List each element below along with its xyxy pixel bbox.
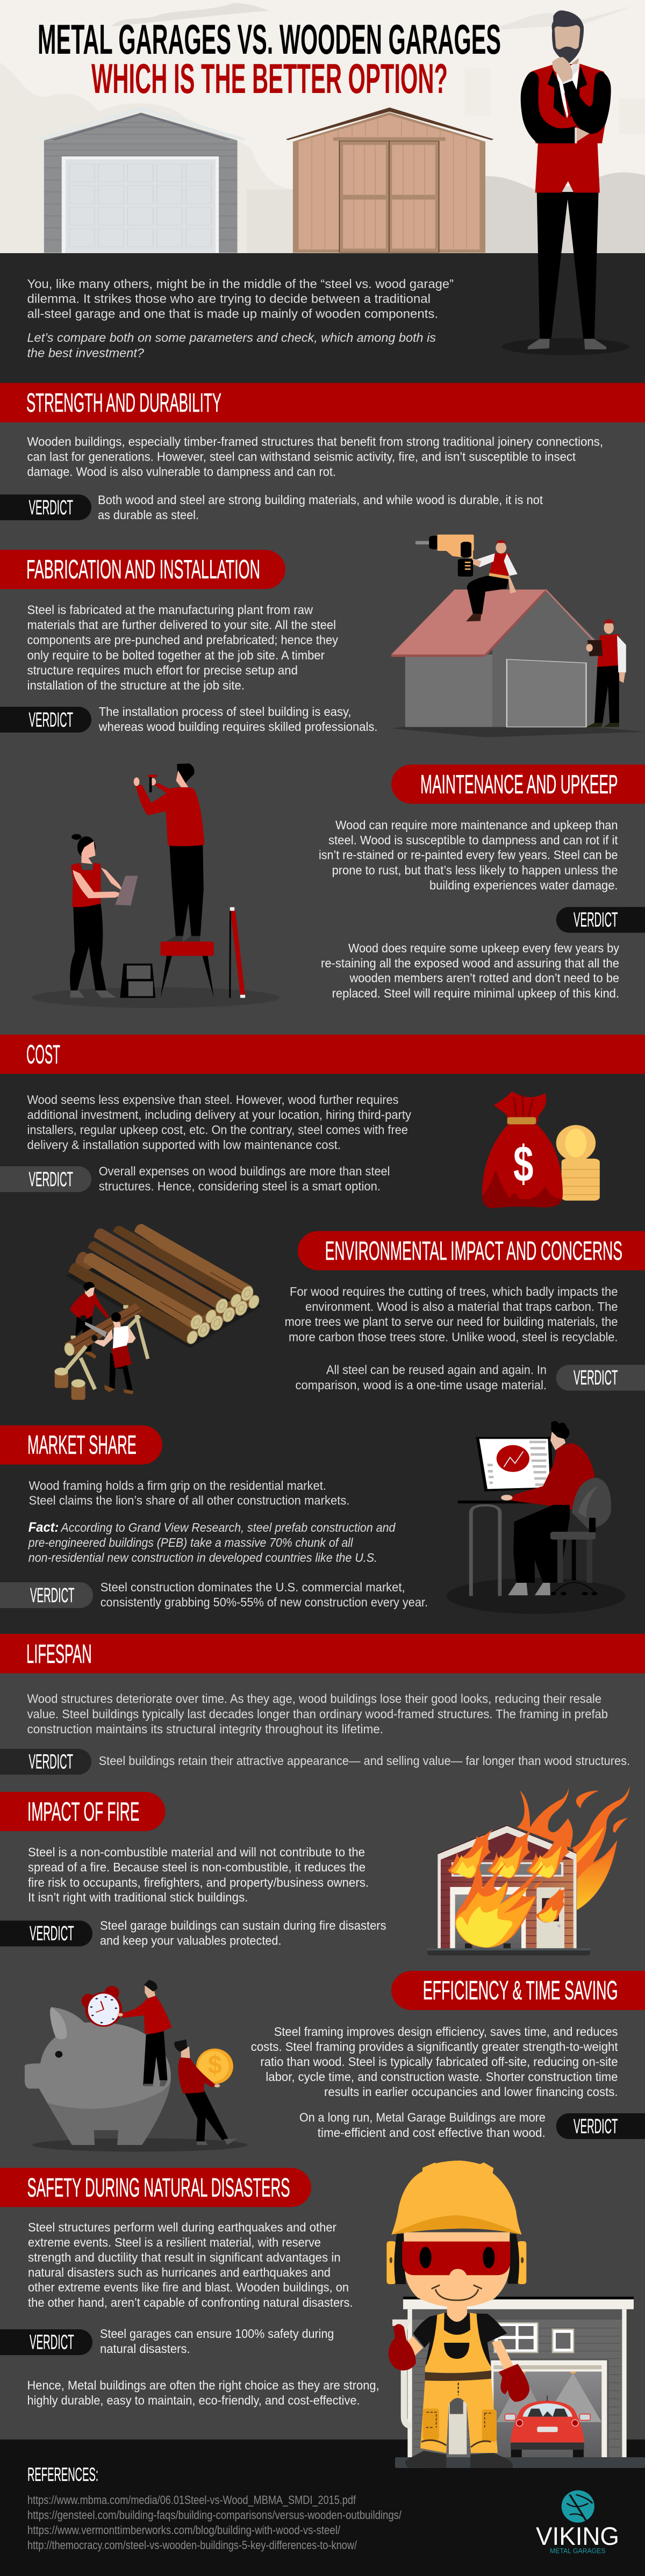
intro text: dilemma. It strikes those who are trying to decide between a traditional <box>27 291 431 305</box>
verdict: efficiency: time-efficient and cost effective than wood. <box>318 2126 546 2140</box>
text: maintenance and upkeep: isn’t re-stained or re-painted every few years. Steel can be <box>319 848 618 862</box>
verdict: fabrication: The installation process of steel building is easy, <box>99 705 351 719</box>
worker sitting on roof with drill <box>415 535 518 621</box>
conclusion text <box>27 2378 379 2407</box>
verdict: fabrication <box>0 705 377 734</box>
stool <box>160 942 214 998</box>
text: efficiency: results in earlier occupancies and lower financing costs. <box>324 2085 618 2099</box>
verdict: environmental <box>296 1363 645 1392</box>
text: fabrication and installation: components are pre-punched and prefabricated; hence they <box>27 633 338 647</box>
desk legs <box>471 1505 500 1596</box>
man on stool with hammer <box>134 764 204 942</box>
illustration: couple repairing with stool <box>31 764 280 1008</box>
text: strength and durability: Wooden buildings, especially timber-framed structures that benefit from strong traditional joinery connections, <box>27 434 603 448</box>
text: safety: other extreme events like fire and blast. Wooden buildings, on <box>28 2280 349 2294</box>
piggy bank <box>25 2007 171 2145</box>
alarm clock <box>82 1986 122 2027</box>
verdict: efficiency <box>299 2111 645 2140</box>
illustration: garage with red car <box>392 2297 645 2468</box>
text: efficiency: ratio than wood. Steel is typically fabricated off-site, reducing on-site <box>260 2055 618 2069</box>
text: impact of fire: It isn’t right with traditional stick buildings. <box>28 1890 248 1904</box>
mitts <box>389 2324 529 2402</box>
text: strength and durability: can last for generations. However, steel can withstand seismic activity, fire, and isn’t susceptible to insect <box>27 449 576 463</box>
text: fabrication and installation: materials that are further delivered to your site. All the steel <box>27 618 336 632</box>
text: efficiency: Steel framing improves design efficiency, saves time, and reduces <box>274 2025 618 2039</box>
verdict: safety <box>0 2327 334 2356</box>
text: environmental impact: environment. Wood is also a material that traps carbon. The <box>305 1300 618 1314</box>
fact text: non-residential new construction in developed countries like the U.S. <box>28 1551 377 1565</box>
text: fabrication and installation: only require to be bolted together at the job site. A timber <box>27 648 325 662</box>
text: market share: Steel claims the lion’s share of all other construction markets. <box>29 1494 349 1508</box>
banner: impact of fire <box>0 1792 166 1831</box>
verdict: fire <box>0 1919 386 1948</box>
text: lifespan: Wood structures deteriorate over time. As they age, wood buildings lose their good looks, reducing their resale <box>27 1692 601 1706</box>
verdict: maintenance: re-staining all the exposed wood and assuring that all the <box>321 956 619 970</box>
banner: strength and durability <box>0 383 645 422</box>
references list: http://themocracy.com/steel-vs-wooden-buildings-5-key-differences-to-know/ <box>27 2538 357 2552</box>
text: efficiency: labor, cycle time, and construction waste. Shorter construction time <box>266 2070 618 2084</box>
banner: cost: COST <box>26 1039 60 1070</box>
illustration: piggy bank with clock and coin <box>25 1980 248 2152</box>
banner: environmental impact and concerns <box>298 1231 645 1271</box>
text: environmental impact: more carbon those trees store. Unlike wood, steel is recyclable. <box>289 1330 618 1344</box>
arms <box>407 2336 513 2372</box>
logo: Viking Metal Garages <box>536 2490 619 2555</box>
text: efficiency: costs. Steel framing provides a significantly greater strength-to-weight <box>251 2040 618 2054</box>
fact text: Fact: <box>28 1520 59 1535</box>
text: impact of fire: Steel is a non-combustible material and will not contribute to the <box>28 1845 365 1859</box>
text: safety: Steel structures perform well during earthquakes and other <box>28 2220 336 2234</box>
references list: https://www.mbma.com/media/06.01Steel-vs-Wood_MBMA_SMDI_2015.pdf <box>27 2493 356 2507</box>
verdict: market share: VERDICT <box>30 1584 74 1607</box>
chair <box>508 1478 611 1595</box>
flames in front <box>448 1829 571 1948</box>
fact text <box>28 1520 396 1565</box>
illustration: burning house <box>427 1786 630 1955</box>
torso with overalls <box>413 2306 507 2381</box>
text: safety: natural disasters such as hurricanes and earthquakes and <box>28 2265 331 2279</box>
text: environmental impact: more trees we plant to serve our need for building materials, the <box>285 1315 618 1329</box>
intro text: You, like many others, might be in the middle of the “steel vs. wood garage” <box>27 277 454 291</box>
banner: efficiency and time saving <box>391 1971 645 2010</box>
verdict: market share <box>0 1580 428 1609</box>
text: market share: Wood framing holds a firm grip on the residential market. <box>29 1479 326 1492</box>
text: safety: strength and ductility that result in significant advantages in <box>28 2250 341 2264</box>
fact text: According to Grand View Research, steel prefab construction and <box>60 1520 396 1534</box>
folding ladder <box>120 964 155 998</box>
verdict: market share: consistently grabbing 50%-55% of new construction every year. <box>101 1595 428 1609</box>
references heading: REFERENCES: <box>27 2464 98 2485</box>
text: safety: extreme events. Steel is a resilient material, with reserve <box>28 2235 321 2249</box>
banner: fabrication and installation <box>0 550 285 589</box>
banner: cost <box>0 1035 645 1074</box>
intro text: all-steel garage and one that is made up mainly of wooden components. <box>27 306 438 320</box>
text: fabrication and installation: structure requires much effort for precise setup and <box>27 663 298 677</box>
verdict: lifespan: VERDICT <box>29 1751 73 1774</box>
conclusion text: Hence, Metal buildings are often the right choice as they are strong, <box>27 2378 379 2392</box>
man holding clock <box>117 1980 172 2086</box>
man holding coin <box>174 2040 238 2145</box>
text: maintenance and upkeep: prone to rust, but that’s less likely to happen unless the <box>332 863 618 877</box>
sawhorse and log <box>63 1303 148 1389</box>
intro text: the best investment? <box>27 346 144 360</box>
verdict: safety: natural disasters. <box>100 2342 190 2356</box>
head with helmet and visor <box>386 2161 526 2307</box>
red car <box>505 2395 590 2459</box>
verdict: efficiency: On a long run, Metal Garage Buildings are more <box>299 2111 546 2125</box>
verdict: environmental: comparison, wood is a one-time usage material. <box>296 1378 547 1392</box>
verdict: market share: Steel construction dominates the U.S. commercial market, <box>101 1580 405 1594</box>
text: environmental impact: For wood requires the cutting of trees, which badly impacts the <box>290 1285 618 1298</box>
illustration: wooden garage <box>286 107 493 253</box>
garage opening <box>490 2358 609 2458</box>
flames behind house <box>517 1786 630 1910</box>
intro text: Let’s compare both on some parameters and check, which among both is <box>27 331 436 345</box>
verdict: maintenance: Wood does require some upkeep every few years by <box>348 941 619 955</box>
text: cost: additional investment, including delivery at your location, hiring third-party <box>27 1108 411 1122</box>
icon: coin dollar sign: $ <box>208 2050 222 2079</box>
banner: lifespan <box>0 1634 645 1673</box>
banner: market share: MARKET SHARE <box>27 1430 137 1460</box>
verdict: maintenance: wooden members aren’t rotted and don’t need to be <box>349 971 619 985</box>
lumberjack in red <box>69 1282 109 1359</box>
verdict: cost: structures. Hence, considering steel is a smart option. <box>99 1179 381 1193</box>
title <box>38 16 501 102</box>
verdict: environmental: All steel can be reused again and again. In <box>326 1363 547 1377</box>
text: lifespan: value. Steel buildings typically last decades longer than ordinary wood-framed structures. The framing in prefab <box>27 1707 608 1721</box>
text: impact of fire: spread of a fire. Because steel is non-combustible, it reduces the <box>28 1860 366 1874</box>
logo: Viking Metal Garages: METAL GARAGES <box>550 2547 606 2555</box>
references list: https://www.vermonttimberworks.com/blog/building-with-wood-vs-steel/ <box>27 2523 341 2537</box>
icon: dollar sign on bag: $ <box>513 1136 533 1193</box>
leaning pole <box>229 907 245 998</box>
text: fabrication and installation: Steel is fabricated at the manufacturing plant from raw <box>27 603 313 617</box>
text: market share <box>29 1479 349 1508</box>
banner: maintenance and upkeep <box>391 764 645 804</box>
text: cost: installers, regular upkeep cost, etc. On the contrary, steel comes with free <box>27 1123 408 1137</box>
text: lifespan <box>27 1692 608 1736</box>
verdict: cost: VERDICT <box>29 1168 73 1191</box>
verdict: lifespan <box>0 1749 630 1775</box>
legs and boots <box>405 2379 513 2468</box>
illustration: man at computer <box>446 1421 626 1614</box>
text: impact of fire: fire risk to occupants, firefighters, and property/business owners. <box>28 1876 369 1890</box>
text: maintenance and upkeep: Wood can require more maintenance and upkeep than <box>335 818 618 832</box>
text: safety: the other hand, aren’t capable of confronting natural disasters. <box>28 2295 353 2309</box>
illustration: house with workers <box>391 535 645 737</box>
text: strength and durability <box>27 434 603 478</box>
verdict: maintenance: replaced. Steel will require minimal upkeep of this kind. <box>332 986 619 1000</box>
white side pipe <box>392 2323 412 2426</box>
verdict: safety: Steel garages can ensure 100% safety during <box>100 2327 334 2341</box>
verdict: strength: VERDICT <box>29 497 73 519</box>
text: maintenance and upkeep <box>319 818 618 892</box>
verdict: strength <box>0 493 543 522</box>
lumberjack sawing <box>85 1312 136 1394</box>
conclusion text: highly durable, easy to maintain, eco-friendly, and cost-effective. <box>27 2393 360 2407</box>
text: lifespan: construction maintains its structural integrity throughout its lifetime. <box>27 1722 383 1736</box>
verdict: fabrication: VERDICT <box>29 709 73 731</box>
verdict: safety: VERDICT <box>30 2331 74 2354</box>
woman with tablet <box>70 834 138 998</box>
text: fabrication and installation: installation of the structure at the job site. <box>27 678 245 692</box>
verdict: strength: as durable as steel. <box>98 508 199 522</box>
text: environmental impact <box>285 1285 618 1344</box>
verdict: maintenance <box>321 907 645 1000</box>
verdict: fire: Steel garage buildings can sustain during fire disasters <box>100 1919 386 1933</box>
illustration: cartoon builder giving thumbs up <box>386 2161 529 2468</box>
references list: https://gensteel.com/building-faqs/building-comparisons/versus-wooden-outbuildings/ <box>27 2508 402 2522</box>
fact text: pre-engineered buildings (PEB) take a massive 70% chunk of all <box>28 1535 353 1549</box>
worker standing with clipboard <box>586 619 626 727</box>
text: cost <box>27 1093 411 1152</box>
icon: money bag and coins <box>482 1091 600 1208</box>
seated man torso and head <box>501 1421 597 1510</box>
verdict: cost <box>0 1164 390 1193</box>
banner: safety during natural disasters: SAFETY DURING NATURAL DISASTERS <box>27 2173 290 2202</box>
garage windows <box>493 2322 574 2353</box>
text: safety <box>28 2220 353 2309</box>
verdict: cost: Overall expenses on wood buildings are more than steel <box>99 1164 390 1178</box>
banner: strength and durability: STRENGTH AND DURABILITY <box>26 388 221 418</box>
text: cost: Wood seems less expensive than steel. However, wood further requires <box>27 1093 399 1107</box>
text: efficiency <box>251 2025 618 2099</box>
text: fabrication and installation <box>27 603 338 692</box>
log stumps <box>54 1368 85 1400</box>
banner: safety during natural disasters <box>0 2168 311 2207</box>
banner: impact of fire: IMPACT OF FIRE <box>27 1797 139 1826</box>
text: impact of fire <box>28 1845 369 1904</box>
references list <box>27 2493 402 2552</box>
illustration: thinking man in red suit <box>502 10 629 355</box>
verdict: fire: and keep your valuables protected. <box>100 1934 282 1948</box>
illustration: metal garage <box>36 107 246 253</box>
verdict: fire: VERDICT <box>30 1922 74 1945</box>
monitor with chart <box>476 1437 553 1491</box>
text: cost: delivery & installation supported with low maintenance cost. <box>27 1138 341 1152</box>
intro text <box>27 277 454 360</box>
text: maintenance and upkeep: building experiences water damage. <box>429 878 618 892</box>
verdict: fabrication: whereas wood building requires skilled professionals. <box>98 720 377 734</box>
house body <box>427 1826 590 1955</box>
text: strength and durability: damage. Wood is also vulnerable to dampness and can rot. <box>27 464 336 478</box>
verdict: strength: Both wood and steel are strong building materials, and while wood is durable, it is not <box>98 493 543 507</box>
text: maintenance and upkeep: steel. Wood is susceptible to dampness and can rot if it <box>328 833 618 847</box>
banner: lifespan: LIFESPAN <box>26 1639 92 1669</box>
illustration: logs with lumberjacks <box>54 1224 262 1400</box>
logo: Viking Metal Garages: VIKING <box>536 2522 619 2550</box>
background hills and clouds <box>0 3 645 253</box>
banner: market share <box>0 1425 162 1465</box>
gold coin <box>196 2049 233 2084</box>
banner: fabrication and installation: FABRICATION AND INSTALLATION <box>26 555 260 584</box>
